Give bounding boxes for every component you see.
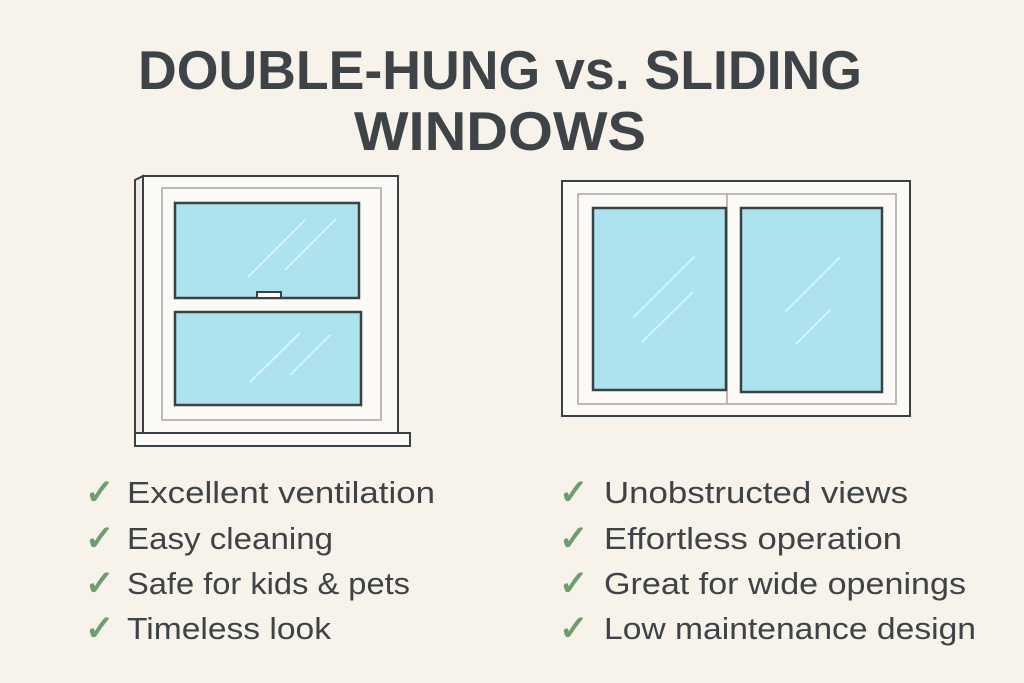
list: sliding benefits: Effortless operation (604, 521, 902, 556)
list: double-hung benefits: ✓ (85, 564, 114, 603)
list: sliding benefits: ✓ (559, 519, 588, 558)
list: sliding benefits: Unobstructed views (604, 475, 908, 510)
list: double-hung benefits (85, 473, 435, 648)
list: sliding benefits: Low maintenance design (604, 611, 976, 646)
list: double-hung benefits: Easy cleaning (127, 521, 333, 556)
icon: double-hung window (135, 176, 410, 446)
title: WINDOWS (354, 100, 646, 162)
title: DOUBLE-HUNG vs. SLIDING (138, 39, 862, 101)
list: double-hung benefits: ✓ (85, 473, 114, 512)
list: double-hung benefits: Timeless look (127, 611, 332, 646)
list: sliding benefits: ✓ (559, 473, 588, 512)
list: sliding benefits: ✓ (559, 609, 588, 648)
list: double-hung benefits: Safe for kids & pets (127, 566, 410, 601)
title (138, 39, 862, 162)
icon: sliding window (562, 181, 910, 416)
list: sliding benefits: Great for wide openings (604, 566, 966, 601)
list: double-hung benefits: Excellent ventilation (127, 475, 435, 510)
list: sliding benefits: ✓ (559, 564, 588, 603)
list: sliding benefits (559, 473, 976, 648)
list: double-hung benefits: ✓ (85, 519, 114, 558)
list: double-hung benefits: ✓ (85, 609, 114, 648)
